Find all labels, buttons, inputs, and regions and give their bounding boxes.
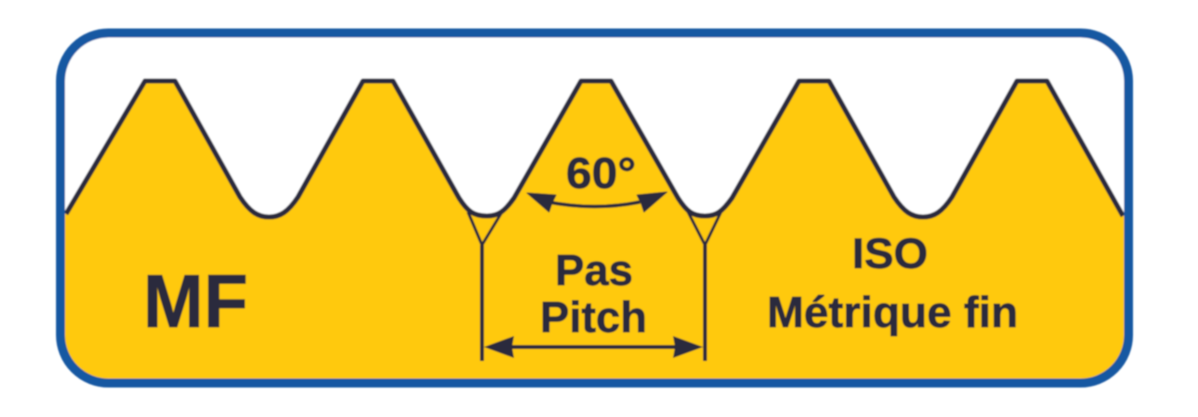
angle label: 60°	[566, 149, 636, 198]
thread profile diagram	[54, 27, 1134, 389]
blue panel border	[60, 33, 1128, 383]
pitch extension lines with V marks	[468, 212, 721, 361]
ISO label: ISO	[852, 230, 928, 278]
60 degree angle arrow	[527, 192, 667, 212]
yellow thread body	[55, 81, 1135, 390]
pitch dimension arrow	[484, 336, 703, 358]
pitch label English: Pitch	[540, 293, 647, 342]
metric fine label: Métrique fin	[767, 288, 1018, 337]
MF label: MF	[143, 259, 248, 343]
thread outline	[66, 81, 1123, 217]
panel background	[60, 33, 1128, 383]
pitch label French: Pas	[555, 246, 633, 295]
